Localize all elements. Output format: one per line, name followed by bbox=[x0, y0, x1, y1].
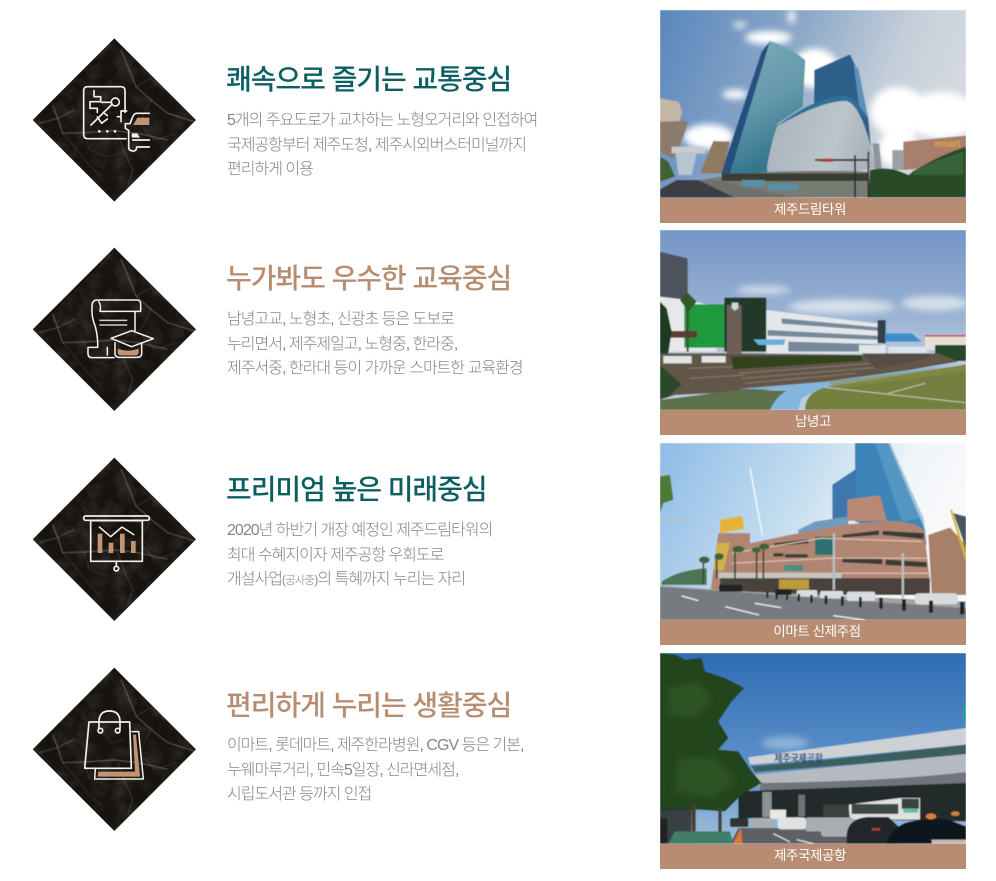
text: future description bbox=[227, 522, 492, 588]
panel: living icon diamond bbox=[32, 668, 196, 831]
photo: Namnyeong High School bbox=[660, 230, 966, 410]
photo: Jeju Dream Tower bbox=[660, 10, 966, 198]
photo: Jeju International Airport: 제주국제공항 bbox=[774, 752, 823, 765]
text: education description bbox=[227, 310, 523, 377]
text: future description: 최대 수혜지이자 제주공항 우회도로 bbox=[227, 546, 444, 564]
text: transport description: 국제공항부터 제주도청, 제주시외버스터미널까지 bbox=[227, 136, 526, 154]
text: transport description bbox=[227, 112, 537, 178]
heading: education: 누가봐도 우수한 교육중심 bbox=[226, 263, 511, 294]
photo: Jeju International Airport bbox=[660, 653, 966, 844]
caption: Namnyeong High School: 남녕고 bbox=[795, 414, 831, 429]
text: living description: 시립도서관 등까지 인접 bbox=[227, 786, 371, 803]
text: future description: 개설사업(공사중)의 특혜까지 누리는 자리 bbox=[227, 571, 465, 588]
icon: presentation board with chart bbox=[84, 516, 149, 571]
caption: E-mart Sinjeju branch: 이마트 신제주점 bbox=[773, 624, 861, 639]
heading: living: 편리하게 누리는 생활중심 bbox=[226, 690, 511, 721]
photo: Jeju Dream Tower: emart bbox=[934, 139, 961, 150]
caption: E-mart Sinjeju branch bbox=[660, 620, 966, 645]
text: transport description: 편리하게 이용 bbox=[227, 161, 313, 178]
text: living description: 이마트, 롯데마트, 제주한라병원, CGV 등은 기본, bbox=[227, 737, 524, 754]
caption: Jeju Dream Tower: 제주드림타워 bbox=[774, 202, 846, 217]
caption: Jeju International Airport: 제주국제공항 bbox=[774, 848, 846, 863]
text: future description: 2020년 하반기 개장 예정인 제주드림타워의 bbox=[227, 522, 492, 539]
text: living description: 누웨마루거리, 민속5일장, 신라면세점, bbox=[227, 762, 458, 778]
panel: transport icon diamond bbox=[32, 38, 196, 202]
heading: transport: 쾌속으로 즐기는 교통중심 bbox=[226, 64, 511, 95]
text: education description: 누리면서, 제주제일고, 노형중, 한라중, bbox=[227, 336, 457, 352]
text: education description: 남녕고교, 노형초, 신광초 등은 도보로 bbox=[227, 311, 454, 328]
icon: map and car bbox=[84, 87, 149, 151]
caption: Jeju International Airport bbox=[660, 844, 966, 869]
text: transport description: 5개의 주요도로가 교차하는 노형오거리와 인접하여 bbox=[227, 112, 537, 129]
icon: shopping bags bbox=[85, 711, 143, 779]
icon: scroll and graduation cap bbox=[88, 300, 153, 358]
caption: Jeju Dream Tower bbox=[660, 198, 966, 223]
text: living description bbox=[227, 736, 524, 803]
text: education description: 제주서중, 한라대 등이 가까운 스마트한 교육환경 bbox=[227, 360, 523, 377]
caption: Namnyeong High School bbox=[660, 410, 966, 435]
panel: education icon diamond bbox=[32, 248, 196, 411]
heading: future: 프리미엄 높은 미래중심 bbox=[226, 474, 487, 505]
panel: future icon diamond bbox=[32, 458, 196, 621]
photo: E-mart Sinjeju branch bbox=[660, 443, 966, 620]
